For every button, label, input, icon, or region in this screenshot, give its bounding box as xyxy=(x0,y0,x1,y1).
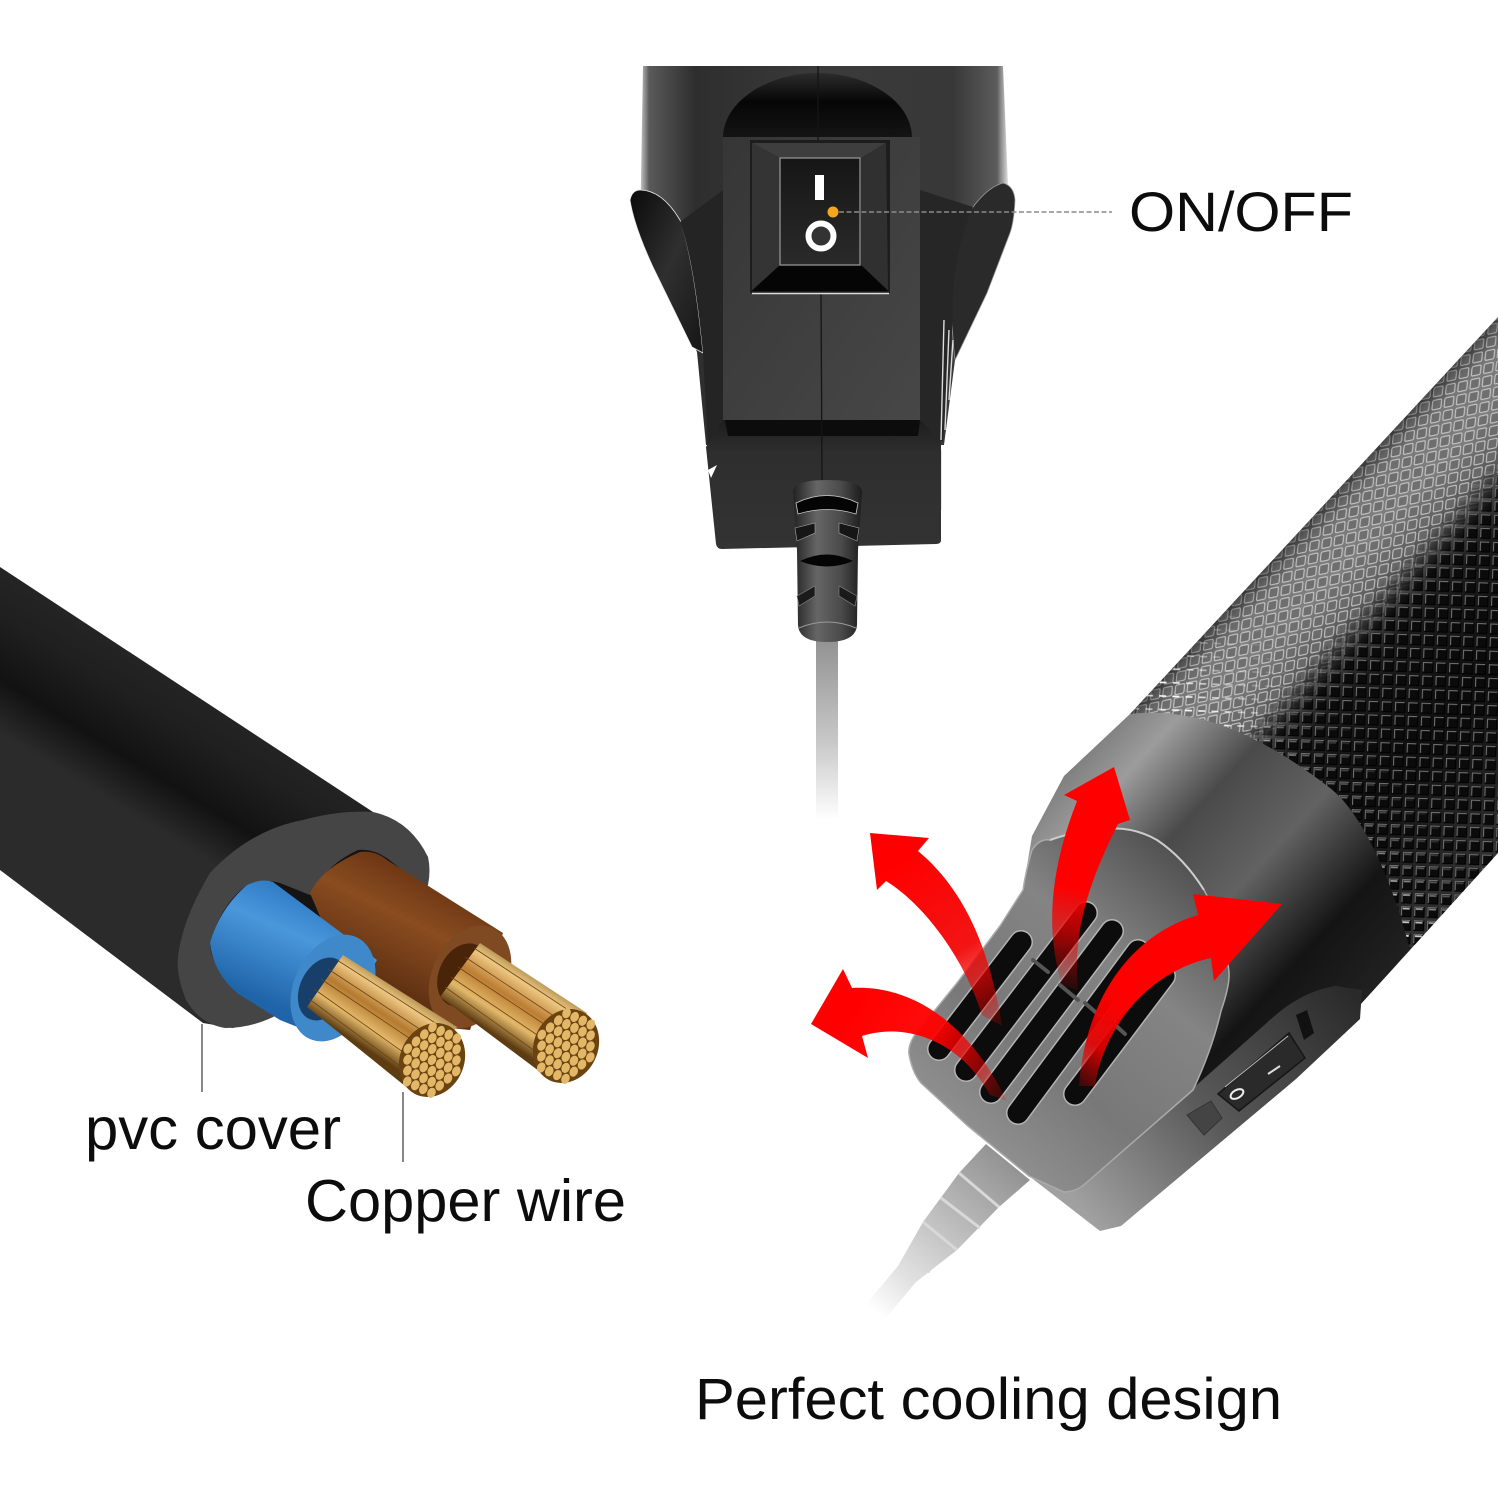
side rocker switch xyxy=(1187,1010,1314,1135)
red arrow: upper left xyxy=(870,833,1002,1026)
cord: gray cable fading out xyxy=(816,625,838,820)
leader line: pvc cover xyxy=(201,1024,203,1092)
jacket openings xyxy=(210,850,440,1010)
red arrow: right xyxy=(1079,894,1282,1086)
red arrow: upward xyxy=(1052,767,1130,990)
left side fin xyxy=(630,190,703,353)
vent slots xyxy=(939,913,1164,1113)
label: ON/OFF: ON/OFF xyxy=(1129,180,1353,243)
smooth collar xyxy=(1023,713,1410,1200)
jacket end face xyxy=(178,812,430,1028)
box shelf shadow xyxy=(725,420,920,436)
vent face plate xyxy=(909,828,1229,1192)
plate-to-body rim highlight xyxy=(1050,828,1204,890)
callout line: ON/OFF xyxy=(839,211,1112,213)
knurled handle xyxy=(1130,317,1498,950)
on mark xyxy=(815,175,824,200)
center panel xyxy=(723,137,920,420)
orange callout dot xyxy=(828,206,838,218)
brown core xyxy=(310,852,611,1094)
blue core xyxy=(210,881,477,1108)
lower side shell xyxy=(1029,986,1362,1231)
copper strands, brown core xyxy=(440,943,611,1094)
label: Copper wire: Copper wire xyxy=(305,1168,626,1234)
cord connector xyxy=(793,480,862,642)
heading: Perfect cooling design: Perfect cooling design xyxy=(695,1367,1282,1432)
seam line xyxy=(818,66,822,480)
device: rear view with rocker switch xyxy=(630,66,1015,820)
device body xyxy=(640,66,1008,445)
device: angled view with cooling vents xyxy=(811,317,1498,1324)
right side shell xyxy=(920,190,973,442)
lower box xyxy=(706,420,941,549)
left side shell xyxy=(680,190,723,447)
rocker switch xyxy=(750,140,890,294)
cord: connector and cable fading out xyxy=(863,1144,1030,1324)
red arrow: far left xyxy=(811,969,1007,1101)
outer jacket xyxy=(0,567,428,1028)
copper strands, blue core xyxy=(307,955,477,1108)
off mark xyxy=(808,224,834,248)
cable: two-core cross section xyxy=(0,567,611,1108)
arch recess xyxy=(723,73,912,137)
right side fin xyxy=(952,183,1015,360)
leader line: copper wire xyxy=(402,1092,404,1162)
label: pvc cover: pvc cover xyxy=(85,1096,341,1162)
